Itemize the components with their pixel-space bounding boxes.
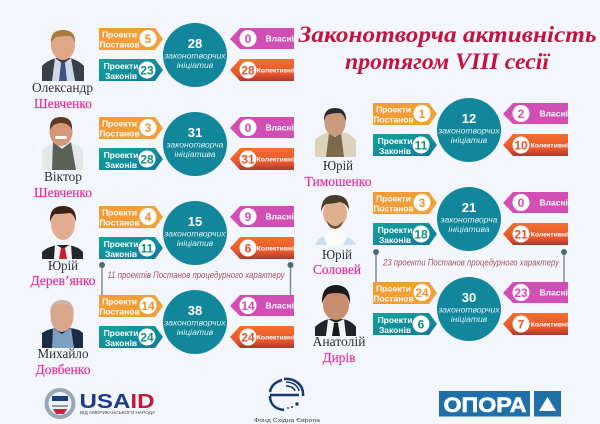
name: Yurii Tymoshenko: Юрій	[323, 159, 353, 174]
block: Mykhailo Dovbenko stats: ініціатив	[177, 327, 214, 337]
block: Anatolii Dyriv stats: ініціатив	[451, 314, 488, 324]
block: Oleksandr Shevchenko stats: Проекти	[102, 30, 137, 40]
block: Mykhailo Dovbenko stats: Постанов	[99, 306, 140, 316]
block: Yurii Derevianko stats: 4	[145, 210, 152, 224]
block: Oleksandr Shevchenko stats: Колективні	[257, 66, 294, 74]
name: Viktor Shevchenko: Віктор	[44, 170, 82, 185]
block: Yurii Solovei stats: 3	[419, 196, 426, 210]
block: Mykhailo Dovbenko stats: 14	[241, 299, 255, 313]
name: Anatolii Dyriv	[312, 335, 366, 366]
photo: Anatolii Dyriv	[315, 285, 356, 336]
connector note: left	[99, 262, 294, 295]
name: Yurii Solovei: Соловей	[313, 263, 361, 278]
block: Oleksandr Shevchenko stats: ініціатив	[177, 60, 214, 70]
block: Yurii Solovei stats: 21	[514, 228, 528, 242]
block: Oleksandr Shevchenko stats: Законів	[105, 71, 137, 81]
photo: Yurii Solovei	[315, 195, 356, 245]
block: Yurii Derevianko stats	[99, 201, 294, 265]
photo: Oleksandr Shevchenko	[42, 30, 84, 81]
block: Yurii Solovei stats: 0	[518, 196, 525, 210]
name: Yurii Derevianko: Юрій	[48, 259, 78, 274]
block: Yurii Derevianko stats: Законів	[105, 249, 137, 259]
block: Oleksandr Shevchenko stats	[99, 23, 294, 87]
block: Oleksandr Shevchenko stats: Постанов	[99, 40, 140, 50]
block: Anatolii Dyriv stats: 23	[514, 286, 528, 300]
block: Yurii Tymoshenko stats	[373, 98, 568, 162]
block: Mykhailo Dovbenko stats: Законів	[105, 338, 137, 348]
block: Mykhailo Dovbenko stats: 38	[188, 303, 202, 318]
block: Mykhailo Dovbenko stats: Проекти	[104, 328, 138, 338]
block: Oleksandr Shevchenko stats: 23	[140, 64, 154, 78]
block: Yurii Tymoshenko stats: Проекти	[376, 104, 411, 114]
block: Oleksandr Shevchenko stats: 0	[245, 32, 252, 46]
block: Viktor Shevchenko stats: Законів	[105, 160, 137, 170]
block: Yurii Derevianko stats: 11	[141, 242, 154, 256]
logo: OPORA: ОПОРА	[444, 394, 526, 417]
name: Yurii Derevianko: Дерев’янко	[30, 274, 96, 289]
logo: USAID: ВІД АМЕРИКАНСЬКОГО НАРОДУ	[80, 410, 155, 415]
block: Viktor Shevchenko stats: 0	[245, 121, 252, 135]
block: Yurii Tymoshenko stats: 2	[518, 107, 525, 121]
name: Anatolii Dyriv: Дирів	[322, 351, 356, 366]
block: Yurii Solovei stats: Проекти	[376, 194, 411, 204]
block: Yurii Solovei stats: Проекти	[378, 225, 412, 235]
connector note: left: 11 проектів Постанов процедурного характеру	[108, 270, 285, 280]
name: Yurii Solovei: Юрій	[322, 248, 352, 263]
block: Anatolii Dyriv stats: Постанов	[373, 294, 414, 304]
block: Viktor Shevchenko stats: 31	[188, 125, 202, 140]
photo: Viktor Shevchenko	[42, 117, 83, 170]
name: Oleksandr Shevchenko: Шевченко	[34, 97, 92, 112]
name: Mykhailo Dovbenko: Довбенко	[36, 363, 90, 378]
block: Oleksandr Shevchenko stats: 28	[241, 64, 255, 78]
block: Mykhailo Dovbenko stats: 14	[141, 299, 155, 313]
block: Anatolii Dyriv stats: Власні	[540, 288, 568, 298]
name: Yurii Tymoshenko: Тимошенко	[304, 175, 372, 190]
name: Yurii Tymoshenko	[304, 159, 372, 190]
block: Viktor Shevchenko stats: Проекти	[104, 150, 138, 160]
block: Anatolii Dyriv stats: законотворчих	[437, 304, 500, 314]
block: Yurii Derevianko stats: 9	[245, 210, 252, 224]
photo: Yurii Tymoshenko	[315, 108, 356, 157]
photo: Mykhailo Dovbenko	[42, 300, 83, 348]
block: Viktor Shevchenko stats: Постанов	[99, 128, 140, 138]
logo: East Europe Foundation: Фонд Східна Європа	[254, 418, 320, 424]
block: Oleksandr Shevchenko stats: Проекти	[104, 61, 138, 71]
name: Yurii Solovei	[313, 248, 361, 278]
block: Mykhailo Dovbenko stats	[99, 290, 294, 354]
block: Yurii Tymoshenko stats: Проекти	[378, 136, 412, 146]
name: Oleksandr Shevchenko	[32, 81, 93, 112]
block: Anatolii Dyriv stats: 6	[418, 318, 425, 332]
logo: OPORA	[439, 391, 561, 417]
block: Viktor Shevchenko stats: Колективні	[257, 156, 294, 164]
name: Viktor Shevchenko: Шевченко	[34, 186, 92, 201]
block: Viktor Shevchenko stats	[99, 112, 294, 176]
name: Mykhailo Dovbenko: Михайло	[38, 347, 88, 362]
block: Anatolii Dyriv stats: Законів	[379, 325, 411, 335]
block: Anatolii Dyriv stats: 7	[518, 318, 525, 332]
block: Yurii Solovei stats	[373, 187, 568, 251]
block: Yurii Derevianko stats: ініціатив	[177, 238, 214, 248]
block: Yurii Tymoshenko stats: законотворчих	[437, 126, 500, 136]
block: Viktor Shevchenko stats: законотворча	[166, 140, 224, 150]
block: Yurii Derevianko stats: Постанов	[99, 218, 140, 228]
block: Viktor Shevchenko stats: 31	[241, 152, 255, 166]
block: Yurii Tymoshenko stats: 10	[514, 138, 528, 152]
block: Yurii Derevianko stats: Проекти	[104, 239, 138, 249]
block: Yurii Solovei stats: Законів	[379, 235, 411, 245]
block: Oleksandr Shevchenko stats: Власні	[266, 34, 294, 44]
block: Anatolii Dyriv stats: Проекти	[376, 284, 411, 294]
block: Yurii Tymoshenko stats: ініціатив	[451, 135, 488, 145]
name: Anatolii Dyriv: Анатолій	[312, 335, 366, 350]
block: Yurii Derevianko stats: Проекти	[102, 208, 137, 218]
block: Oleksandr Shevchenko stats: законотворчих	[163, 50, 226, 60]
block: Mykhailo Dovbenko stats: законотворчих	[163, 318, 226, 328]
block: Yurii Tymoshenko stats: Постанов	[373, 114, 414, 124]
connector note: right	[373, 249, 567, 282]
block: Mykhailo Dovbenko stats: 24	[140, 330, 154, 344]
block: Anatolii Dyriv stats: Проекти	[378, 315, 412, 325]
block: Yurii Solovei stats: Колективні	[531, 230, 568, 238]
block: Yurii Derevianko stats: Колективні	[257, 244, 294, 252]
photo: Yurii Derevianko	[42, 206, 83, 259]
logo: USAID	[44, 388, 155, 419]
block: Mykhailo Dovbenko stats: Колективні	[257, 334, 294, 342]
title: Законотворча активність	[297, 22, 596, 47]
name: Mykhailo Dovbenko	[36, 347, 90, 378]
block: Oleksandr Shevchenko stats: 5	[145, 32, 152, 46]
block: Yurii Tymoshenko stats: Власні	[540, 108, 568, 118]
block: Yurii Derevianko stats: Власні	[266, 212, 294, 222]
block: Yurii Derevianko stats: 6	[245, 242, 252, 256]
name: Yurii Derevianko	[30, 259, 96, 289]
title	[297, 22, 596, 74]
block: Anatolii Dyriv stats: 24	[415, 286, 429, 300]
block: Yurii Solovei stats: законотворча	[440, 214, 498, 224]
block: Viktor Shevchenko stats: 28	[140, 152, 154, 166]
block: Mykhailo Dovbenko stats: Проекти	[102, 296, 137, 306]
block: Yurii Solovei stats: Власні	[540, 198, 568, 208]
logo: East Europe Foundation	[254, 379, 320, 424]
block: Mykhailo Dovbenko stats: Власні	[266, 300, 294, 310]
title: протягом VIII сесії	[345, 49, 551, 74]
name: Oleksandr Shevchenko: Олександр	[32, 81, 93, 96]
block: Mykhailo Dovbenko stats: 24	[241, 330, 255, 344]
block: Yurii Tymoshenko stats: 11	[415, 138, 428, 152]
block: Viktor Shevchenko stats: 3	[145, 121, 152, 135]
block: Yurii Solovei stats: Постанов	[373, 204, 414, 214]
block: Yurii Solovei stats: 21	[462, 200, 476, 215]
block: Anatolii Dyriv stats	[373, 277, 568, 341]
block: Anatolii Dyriv stats: 30	[462, 290, 476, 305]
block: Yurii Solovei stats: 18	[414, 228, 428, 242]
block: Oleksandr Shevchenko stats: 28	[188, 36, 202, 51]
logo: USAID: USA ID	[80, 391, 154, 413]
block: Anatolii Dyriv stats: Колективні	[531, 320, 568, 328]
name: Viktor Shevchenko	[34, 170, 92, 201]
block: Yurii Tymoshenko stats: Законів	[379, 146, 411, 156]
block: Yurii Derevianko stats: законотворчих	[163, 228, 226, 238]
block: Viktor Shevchenko stats: Проекти	[102, 118, 137, 128]
connector note: right: 23 проекти Постанов процедурного характеру	[382, 258, 559, 268]
block: Yurii Tymoshenko stats: Колективні	[531, 142, 568, 150]
block: Yurii Tymoshenko stats: 12	[462, 111, 476, 126]
block: Yurii Derevianko stats: 15	[188, 214, 202, 229]
block: Yurii Solovei stats: ініціатива	[448, 224, 490, 234]
block: Yurii Tymoshenko stats: 1	[419, 107, 426, 121]
block: Viktor Shevchenko stats: ініціатива	[174, 149, 216, 159]
block: Viktor Shevchenko stats: Власні	[266, 122, 294, 132]
